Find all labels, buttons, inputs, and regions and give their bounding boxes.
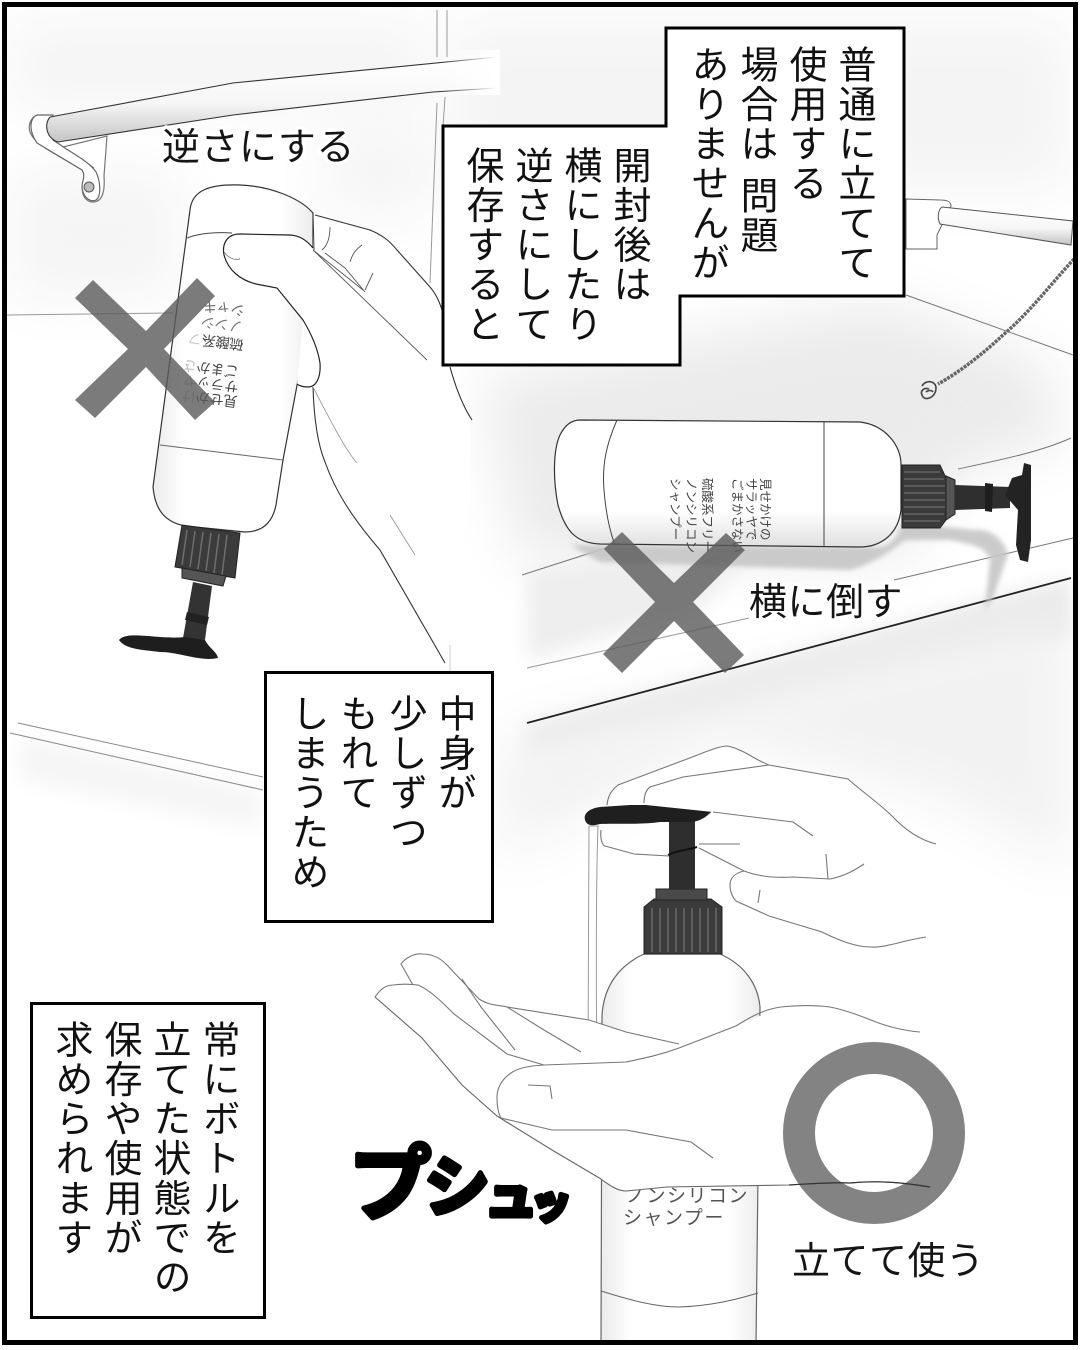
caption text 3: 中身が 少しずつ もれて しまうため bbox=[285, 694, 474, 892]
bath chain bbox=[921, 259, 1074, 399]
cast shadow bbox=[570, 522, 1008, 610]
upright bottle label: ノンシリコン bbox=[626, 1186, 749, 1207]
upright bottle label: シャンプー bbox=[623, 1207, 725, 1229]
upright bottle bbox=[601, 954, 760, 1344]
label: 立てて使う: 立てて使う bbox=[792, 1241, 985, 1283]
side bottle body bbox=[554, 420, 901, 547]
bottle 1 label: ごまかさ bbox=[182, 357, 239, 380]
side bottle label: 硫酸系フリー bbox=[700, 478, 715, 553]
caption: joined top boxes bbox=[442, 26, 906, 366]
X mark on side bottle bbox=[603, 532, 745, 673]
inverted pump bbox=[119, 525, 240, 659]
sound effect: プシュッ: シ bbox=[424, 1150, 490, 1224]
gripping hand bbox=[223, 213, 472, 663]
sound effect: プシュッ: ュ bbox=[484, 1167, 538, 1227]
lower cupped hand bbox=[375, 954, 930, 1191]
side bottle label: サラッヤで bbox=[744, 478, 758, 541]
side bottle label bbox=[668, 478, 772, 553]
upper pressing hand bbox=[601, 746, 936, 947]
sound effect: プシュッ bbox=[349, 1140, 572, 1231]
scene 2: bottle lying on its side bbox=[554, 420, 1031, 610]
hand line over O mark bbox=[789, 1182, 930, 1187]
bottle 1 label: 硫酸系フ bbox=[187, 330, 244, 353]
label: 横に倒す: 横に倒す bbox=[749, 582, 903, 624]
caption text 4: 常にボトルを 立てた状態での 保存や使用が 求められます bbox=[49, 1020, 238, 1297]
inverted bottle body bbox=[153, 185, 313, 532]
bottle 1 label: 見せかけ bbox=[181, 387, 238, 410]
background wash bbox=[10, 20, 1071, 870]
towel bar, top left bbox=[29, 50, 500, 202]
upright pump bbox=[585, 804, 722, 954]
dripping liquid bbox=[567, 826, 618, 1065]
side bottle label: シャンプー bbox=[668, 478, 682, 540]
bottle 1 label: シャキ bbox=[202, 298, 245, 319]
scene 1: hand holding bottle upside down bbox=[119, 185, 472, 663]
side bottle label: ごまかさない bbox=[730, 478, 745, 553]
side pump bbox=[902, 463, 1031, 562]
bottle 1 label: ノンシ bbox=[200, 314, 243, 335]
caption text: 普通に立てて使用する: 普通に立てて 使用する 場合は 問題 ありませんが bbox=[685, 45, 874, 283]
X mark on upside-down bottle bbox=[75, 278, 215, 420]
wall lines bbox=[7, 10, 450, 790]
bottle 1 label: サラッヤ bbox=[182, 372, 239, 395]
sound effect: プシュッ: プ bbox=[349, 1140, 431, 1231]
caption text: 開封後は横にしたり: 開封後は 横にしたり 逆さにして 保存すると bbox=[460, 146, 649, 344]
caption: 常にボトルを bbox=[30, 1002, 266, 1319]
label: 逆さにする: 逆さにする bbox=[162, 127, 355, 169]
shelf lines bbox=[522, 295, 1073, 723]
side bottle label: ノンシリコン bbox=[684, 478, 698, 553]
side bottle label: 見せかけの bbox=[758, 478, 772, 541]
towel bar, top right bbox=[906, 199, 1073, 249]
bottle 1 label bbox=[181, 298, 245, 410]
O mark: correct bbox=[799, 1058, 949, 1208]
upright bottle label bbox=[625, 1188, 746, 1226]
scene 3: correct upright use bbox=[375, 746, 936, 1344]
caption: 中身が少しずつ bbox=[264, 671, 494, 923]
sound effect: プシュッ: ッ bbox=[530, 1180, 572, 1227]
